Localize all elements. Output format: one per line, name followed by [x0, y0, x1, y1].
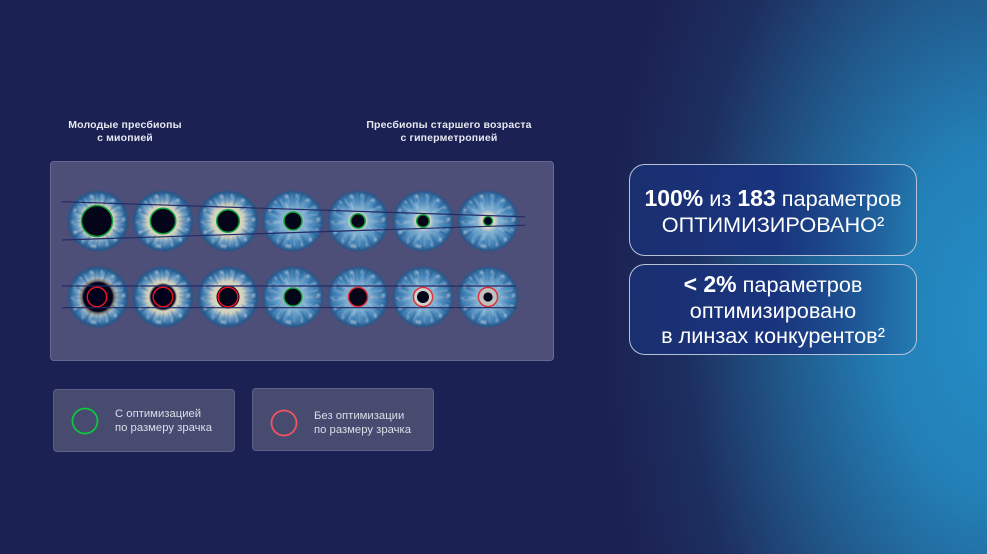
row: non-optimized eyes	[68, 267, 518, 327]
callout: under 2% competitors: оптимизировано	[690, 298, 856, 322]
legend text	[314, 410, 411, 436]
legend text: по размеру зрачка	[115, 422, 212, 434]
callout: 100% of 183 parameters	[629, 164, 917, 256]
legend: with optimization	[53, 389, 235, 452]
legend text: Без оптимизации	[314, 410, 404, 422]
heading: young presbyopes: с миопией	[97, 132, 153, 144]
eye 1	[68, 267, 128, 327]
eye 4	[263, 267, 323, 327]
heading: older presbyopes	[366, 119, 532, 144]
legend: without optimization	[252, 388, 434, 451]
icon: red circle	[270, 410, 298, 436]
eye 7	[458, 191, 518, 251]
lines: bottom row parallel	[62, 286, 516, 308]
eye 3	[198, 191, 258, 251]
legend text	[115, 408, 212, 434]
callout: under 2% competitors	[629, 264, 917, 355]
callout: under 2% competitors: < 2% параметров	[684, 271, 862, 297]
row: optimized eyes	[68, 191, 518, 251]
heading: young presbyopes	[68, 119, 182, 144]
eye 6	[393, 191, 453, 251]
callout: 100% of 183 parameters: 100% из 183 параметров	[644, 185, 902, 211]
chart: eye rows	[62, 190, 525, 328]
eye 4	[263, 191, 323, 251]
eye 3	[198, 267, 258, 327]
eye 5	[328, 191, 388, 251]
panel: pupil comparison	[50, 161, 554, 361]
eye 7	[458, 267, 518, 327]
eye 2	[133, 267, 193, 327]
icon: green circle	[72, 408, 98, 434]
heading: young presbyopes: Молодые пресбиопы	[68, 119, 182, 131]
lines: top row taper	[62, 202, 525, 240]
eye 6	[393, 267, 453, 327]
heading: older presbyopes: с гиперметропией	[400, 132, 497, 144]
callout: under 2% competitors: в линзах конкурентов²	[661, 323, 885, 348]
legend text: по размеру зрачка	[314, 424, 411, 436]
legend text: С оптимизацией	[115, 408, 201, 420]
eye 1	[68, 191, 128, 251]
callout: 100% of 183 parameters: ОПТИМИЗИРОВАНО²	[662, 212, 884, 236]
eye 5	[328, 267, 388, 327]
heading: older presbyopes: Пресбиопы старшего возраста	[366, 119, 532, 131]
eye 2	[133, 191, 193, 251]
